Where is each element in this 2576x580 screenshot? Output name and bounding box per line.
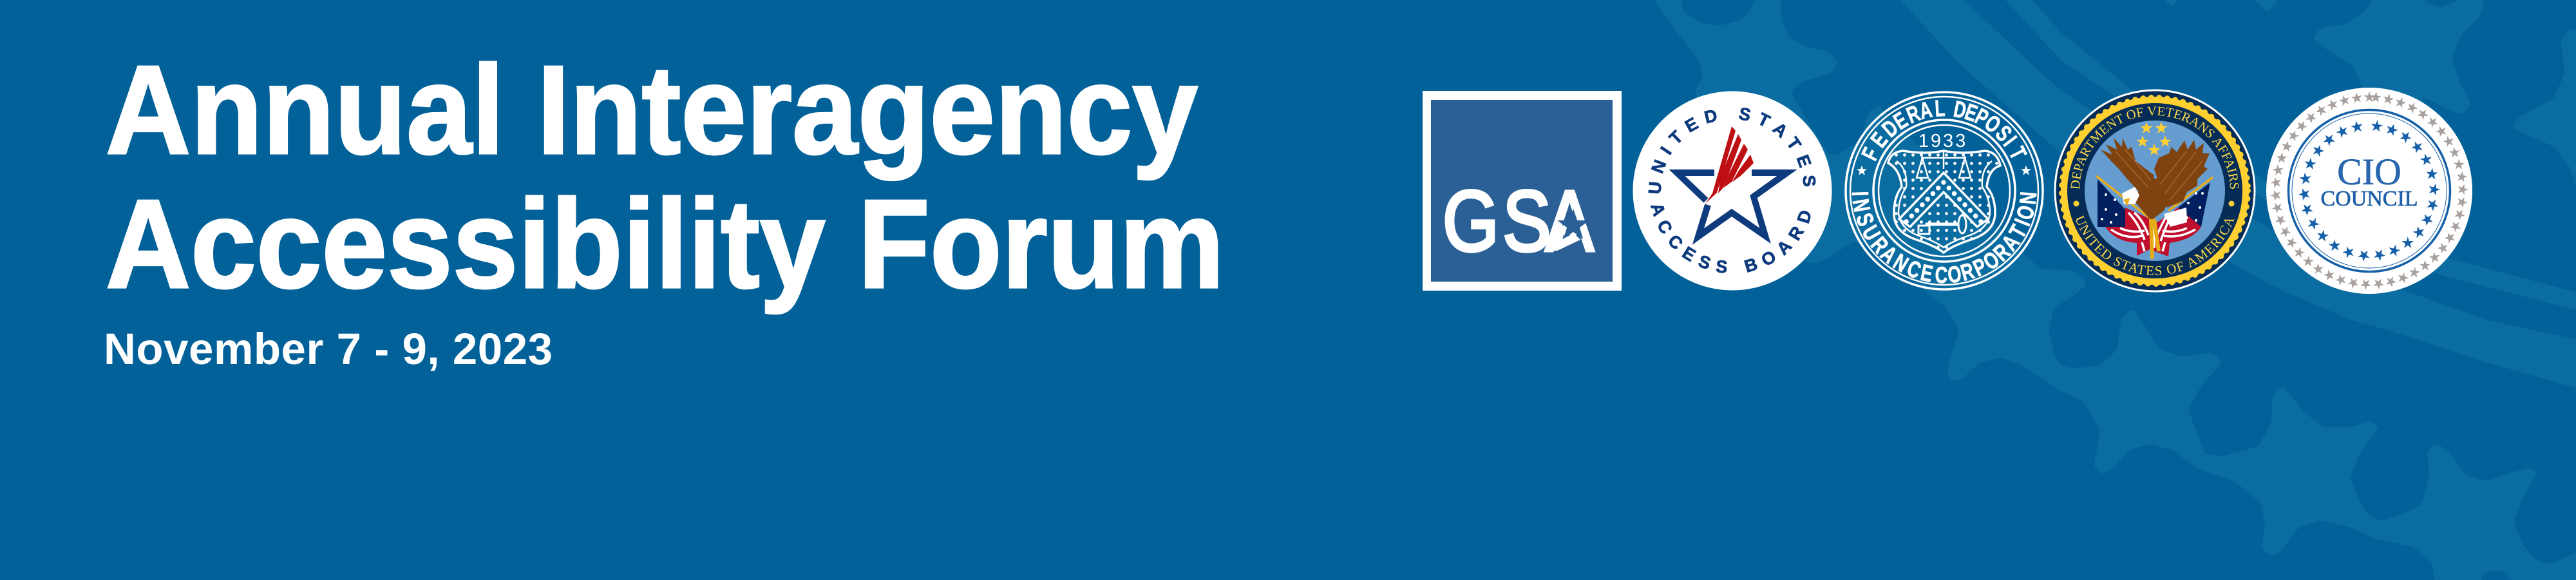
- logo: US Access Board: [1633, 92, 1832, 290]
- FDIC bottom text: R: [1988, 238, 2015, 266]
- FDIC year: 1933: [1918, 131, 1967, 151]
- logo: CIO Council: [2266, 88, 2472, 294]
- FDIC top text: S: [1991, 121, 2017, 146]
- FDIC top text: L: [1934, 95, 1946, 122]
- CIO wordmark: CIO: [2337, 151, 2401, 193]
- FDIC top text: D: [1877, 115, 1903, 142]
- FDIC bottom text: U: [1857, 221, 1886, 245]
- FDIC bottom text: I: [1847, 191, 1873, 197]
- FDIC top text: E: [1962, 99, 1980, 127]
- FDIC bottom text: S: [1851, 209, 1880, 229]
- FDIC top text: O: [1980, 110, 2005, 139]
- VA rope ring: [2062, 98, 2248, 284]
- VA flags: [2098, 179, 2210, 256]
- access board top text: UNITED STATES: [1648, 108, 1816, 193]
- FDIC bottom text: P: [1969, 253, 1991, 282]
- logo: GSA: [1423, 91, 1622, 291]
- FDIC shield: [1888, 150, 2000, 253]
- VA dots: [2074, 201, 2235, 206]
- FDIC top text: F: [1857, 144, 1884, 164]
- FDIC top text: I: [1998, 131, 2022, 151]
- FDIC bottom text: E: [1918, 259, 1935, 287]
- FDIC bottom text: [1847, 191, 2041, 288]
- FDIC bottom text: R: [1866, 231, 1894, 258]
- logo: Department of Veterans Affairs: [2054, 89, 2255, 293]
- background shapes: [1641, 0, 2576, 580]
- FDIC top text: E: [1889, 107, 1912, 135]
- GSA wordmark: S: [1502, 173, 1551, 269]
- access board star: [1677, 126, 1787, 237]
- FDIC bottom text: O: [2011, 202, 2040, 222]
- title: Accessibility Forum: [106, 173, 1224, 314]
- FDIC bottom text: O: [1946, 260, 1963, 288]
- title: [106, 39, 1224, 314]
- FDIC top text: D: [1951, 96, 1968, 124]
- VA spears: [2096, 176, 2213, 219]
- FDIC bottom text: A: [1876, 240, 1902, 268]
- FDIC bottom text: T: [2003, 220, 2032, 242]
- GSA star: [1546, 209, 1589, 251]
- FDIC bottom text: O: [1978, 246, 2004, 275]
- FDIC bottom text: R: [1958, 257, 1977, 286]
- FDIC top text: T: [2004, 143, 2032, 164]
- date: November 7 - 9, 2023: [104, 324, 553, 374]
- COUNCIL wordmark: COUNCIL: [2320, 187, 2418, 211]
- FDIC bottom text: I: [2009, 215, 2035, 229]
- VA bottom text: UNITED STATES OF AMERICA: [2076, 215, 2235, 276]
- FDIC top text: R: [1903, 100, 1924, 128]
- VA eagle: [2101, 138, 2210, 259]
- FDIC bottom text: N: [1889, 248, 1913, 277]
- FDIC top text: E: [1866, 128, 1893, 152]
- VA top text: DEPARTMENT OF VETERANS AFFAIRS: [2070, 106, 2239, 189]
- FDIC top text: P: [1971, 103, 1993, 131]
- title: Annual Interagency: [106, 39, 1198, 180]
- FDIC top text: [1857, 95, 2032, 164]
- FDIC bottom text: N: [1848, 197, 1875, 214]
- GSA wordmark: A: [1546, 173, 1594, 269]
- VA stars: [2137, 122, 2172, 155]
- FDIC bottom text: C: [1935, 262, 1948, 288]
- CIO rings: [2289, 110, 2450, 272]
- FDIC bottom text: N: [2014, 191, 2041, 206]
- FDIC bottom text: A: [1996, 229, 2025, 256]
- logo: FDIC: [1846, 92, 2043, 289]
- access board bottom text: ACCESS BOARD: [1650, 205, 1811, 273]
- GSA wordmark: G: [1443, 173, 1499, 269]
- FDIC side stars: [1857, 165, 2031, 175]
- FDIC bottom text: C: [1904, 255, 1925, 284]
- FDIC top text: A: [1917, 97, 1935, 124]
